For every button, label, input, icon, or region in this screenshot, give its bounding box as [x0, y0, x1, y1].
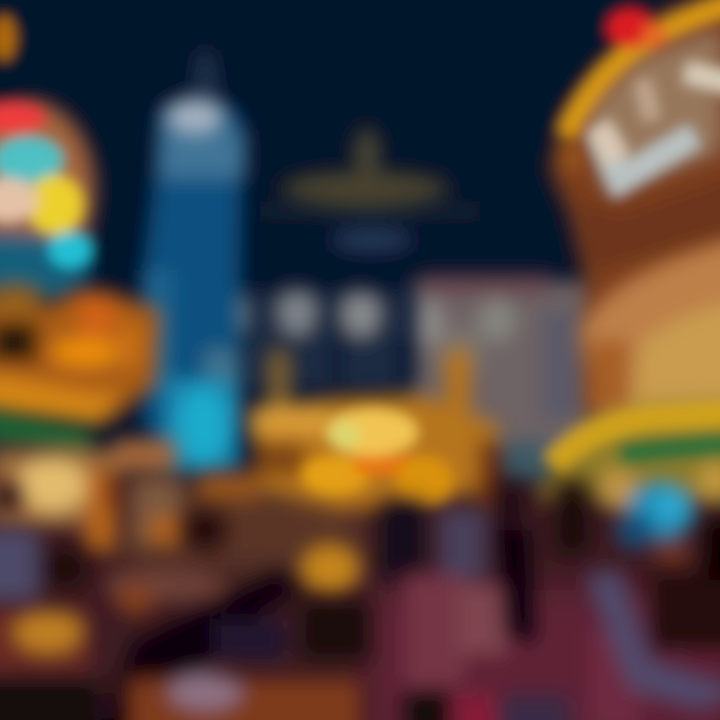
gold dot top left [0, 14, 17, 62]
blue tower [142, 50, 245, 470]
central illuminated sign [260, 128, 480, 253]
middle building with white lights [210, 289, 415, 390]
colourful balloon dome [0, 102, 94, 300]
left green band and cream light [0, 410, 183, 550]
dome lower tan wall [580, 235, 720, 420]
crowd silhouettes [0, 480, 720, 720]
dome sign lettering glow [598, 72, 720, 180]
grey building on the right [412, 276, 597, 480]
blue sphere and warm lights [600, 462, 720, 573]
right dome building [540, 0, 720, 573]
crowd base [0, 470, 720, 720]
central golden building [200, 350, 500, 592]
dome gold rim and red light [566, 0, 720, 135]
yellow and green band [540, 400, 720, 500]
left orange structure [0, 284, 160, 425]
